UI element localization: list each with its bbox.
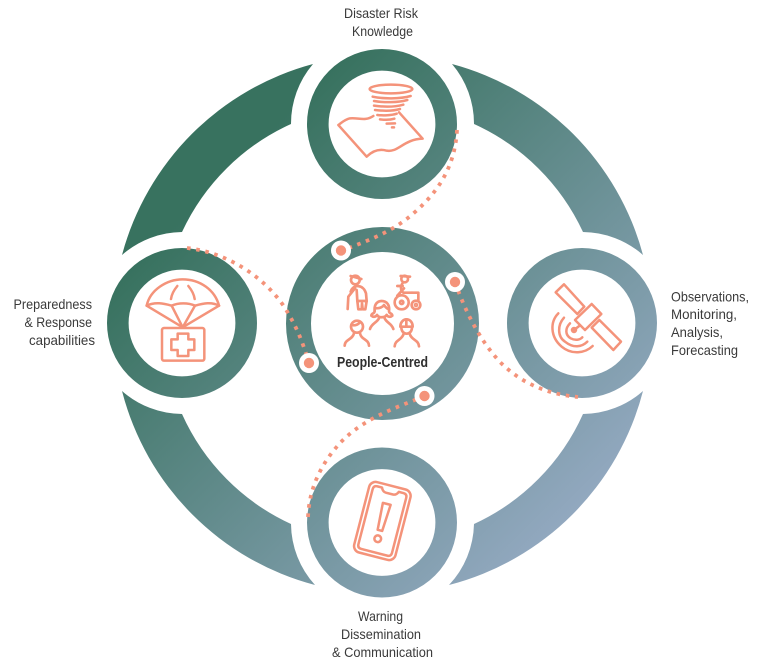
label: Disaster Risk Knowledge: Disaster Risk bbox=[344, 5, 419, 21]
label: People-Centred: People-Centred bbox=[337, 354, 428, 371]
label: Disaster Risk Knowledge bbox=[344, 5, 419, 39]
label: Observations, Monitoring, Analysis, Forecasting: Forecasting bbox=[671, 342, 738, 358]
connector dot: left bbox=[299, 353, 319, 373]
label: Warning Dissemination & Communication: Warning bbox=[358, 608, 403, 624]
icon: phone with alert bbox=[353, 480, 412, 562]
man bbox=[345, 321, 369, 346]
label: Preparedness & Response capabilities: capabilities bbox=[29, 332, 95, 348]
label: Preparedness & Response capabilities: & Response bbox=[24, 314, 92, 330]
label: Warning Dissemination & Communication: & Communication bbox=[332, 644, 433, 660]
person in wheelchair bbox=[395, 276, 420, 309]
label: Observations, Monitoring, Analysis, Forecasting bbox=[671, 288, 749, 358]
connector dot: top bbox=[331, 240, 351, 260]
label: Observations, Monitoring, Analysis, Forecasting: Observations, bbox=[671, 288, 749, 304]
arc: bottom-left segment bbox=[122, 391, 315, 585]
label: Warning Dissemination & Communication: Dissemination bbox=[341, 626, 421, 642]
woman bbox=[370, 301, 393, 329]
person with helmet bbox=[395, 319, 419, 346]
dotted link: centre to top bbox=[341, 130, 457, 251]
dotted link: centre to bottom bbox=[308, 396, 425, 518]
connector dot: bottom bbox=[414, 386, 434, 406]
label: Preparedness & Response capabilities: Preparedness bbox=[14, 296, 92, 312]
arc: top-left segment bbox=[122, 64, 313, 255]
arc: top-right segment bbox=[452, 64, 643, 255]
arc: bottom-right segment bbox=[449, 391, 643, 585]
icon: group of people bbox=[345, 276, 420, 346]
ring: top node bbox=[318, 60, 446, 188]
label: Preparedness & Response capabilities bbox=[14, 296, 95, 348]
ring: left node bbox=[118, 259, 246, 387]
label: Warning Dissemination & Communication bbox=[332, 608, 433, 660]
icon: satellite bbox=[552, 284, 621, 352]
dotted link: centre to left bbox=[187, 248, 309, 363]
icon: tornado over map bbox=[338, 85, 423, 157]
label: Observations, Monitoring, Analysis, Forecasting: Analysis, bbox=[671, 324, 723, 340]
connector dot: right bbox=[445, 272, 465, 292]
elderly person with cane bbox=[348, 276, 367, 309]
label: Disaster Risk Knowledge: Knowledge bbox=[352, 23, 413, 39]
ring: right node bbox=[518, 259, 646, 387]
label: Observations, Monitoring, Analysis, Forecasting: Monitoring, bbox=[671, 306, 737, 322]
icon: parachute with medical box bbox=[147, 279, 219, 361]
ring: bottom node bbox=[318, 458, 446, 587]
ring: centre node bbox=[298, 240, 466, 408]
dotted link: centre to right bbox=[455, 282, 578, 397]
